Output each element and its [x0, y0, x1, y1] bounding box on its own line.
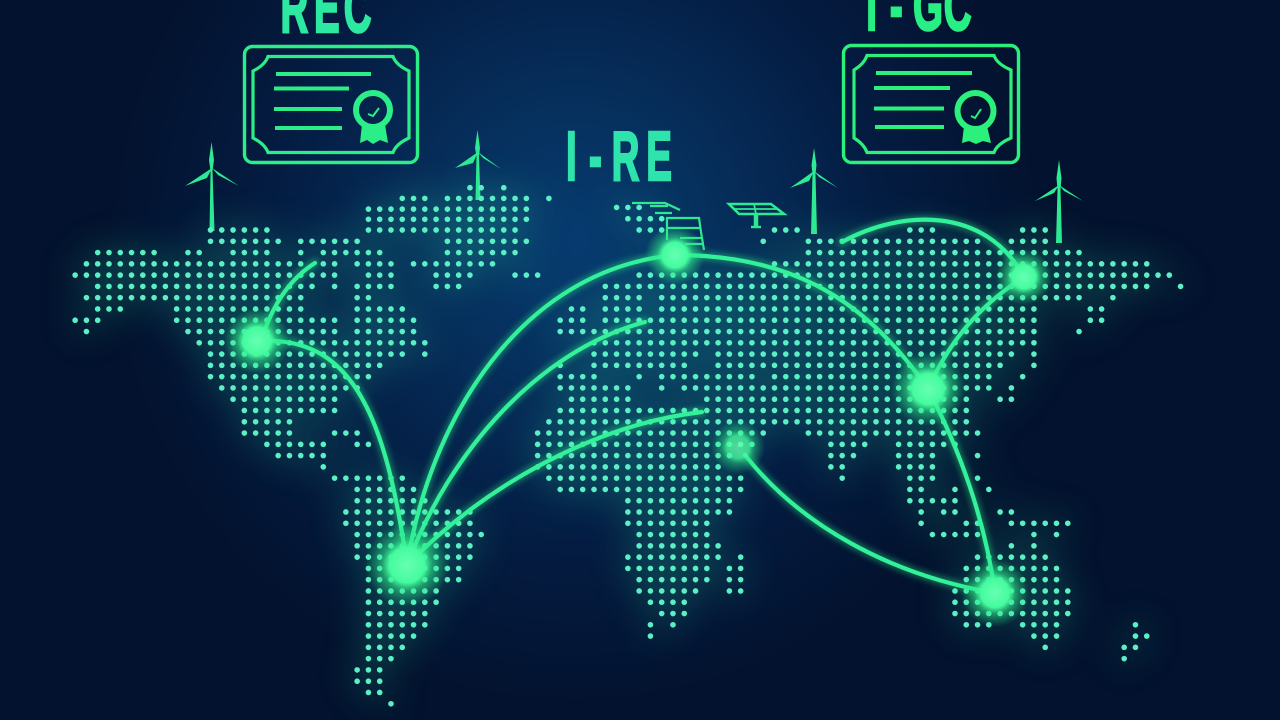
icon: REC certificate: [244, 46, 418, 162]
network arcs: [257, 220, 1024, 593]
icon: solar panel on map: [632, 203, 704, 250]
icon: wind turbine 3: [790, 148, 838, 234]
dotted world map: [75, 188, 1181, 704]
map region: Oceania: [955, 512, 1147, 659]
icon: wind turbine 2: [455, 130, 501, 200]
node: East Russia: [996, 249, 1052, 305]
icon: I-GC certificate: [844, 46, 1018, 162]
node: Middle East: [711, 420, 765, 474]
node: South America: [365, 523, 449, 607]
icon: solar panel: [729, 204, 784, 227]
heading: I-RE: I-RE: [566, 117, 672, 195]
node: North America: [224, 308, 290, 374]
node: China: [891, 352, 965, 426]
arc lines: [257, 220, 1024, 593]
node: Europe: [645, 225, 705, 285]
glowing network nodes: [224, 225, 1052, 627]
icon: wind turbine 1: [185, 142, 239, 231]
arc glow: [257, 220, 1024, 593]
node: Australia: [961, 559, 1029, 627]
map region: Greenland: [368, 188, 549, 286]
map region: Eurasia and Africa: [538, 207, 1181, 636]
map region: Americas: [75, 230, 481, 704]
icon: wind turbine 4: [1035, 160, 1083, 243]
